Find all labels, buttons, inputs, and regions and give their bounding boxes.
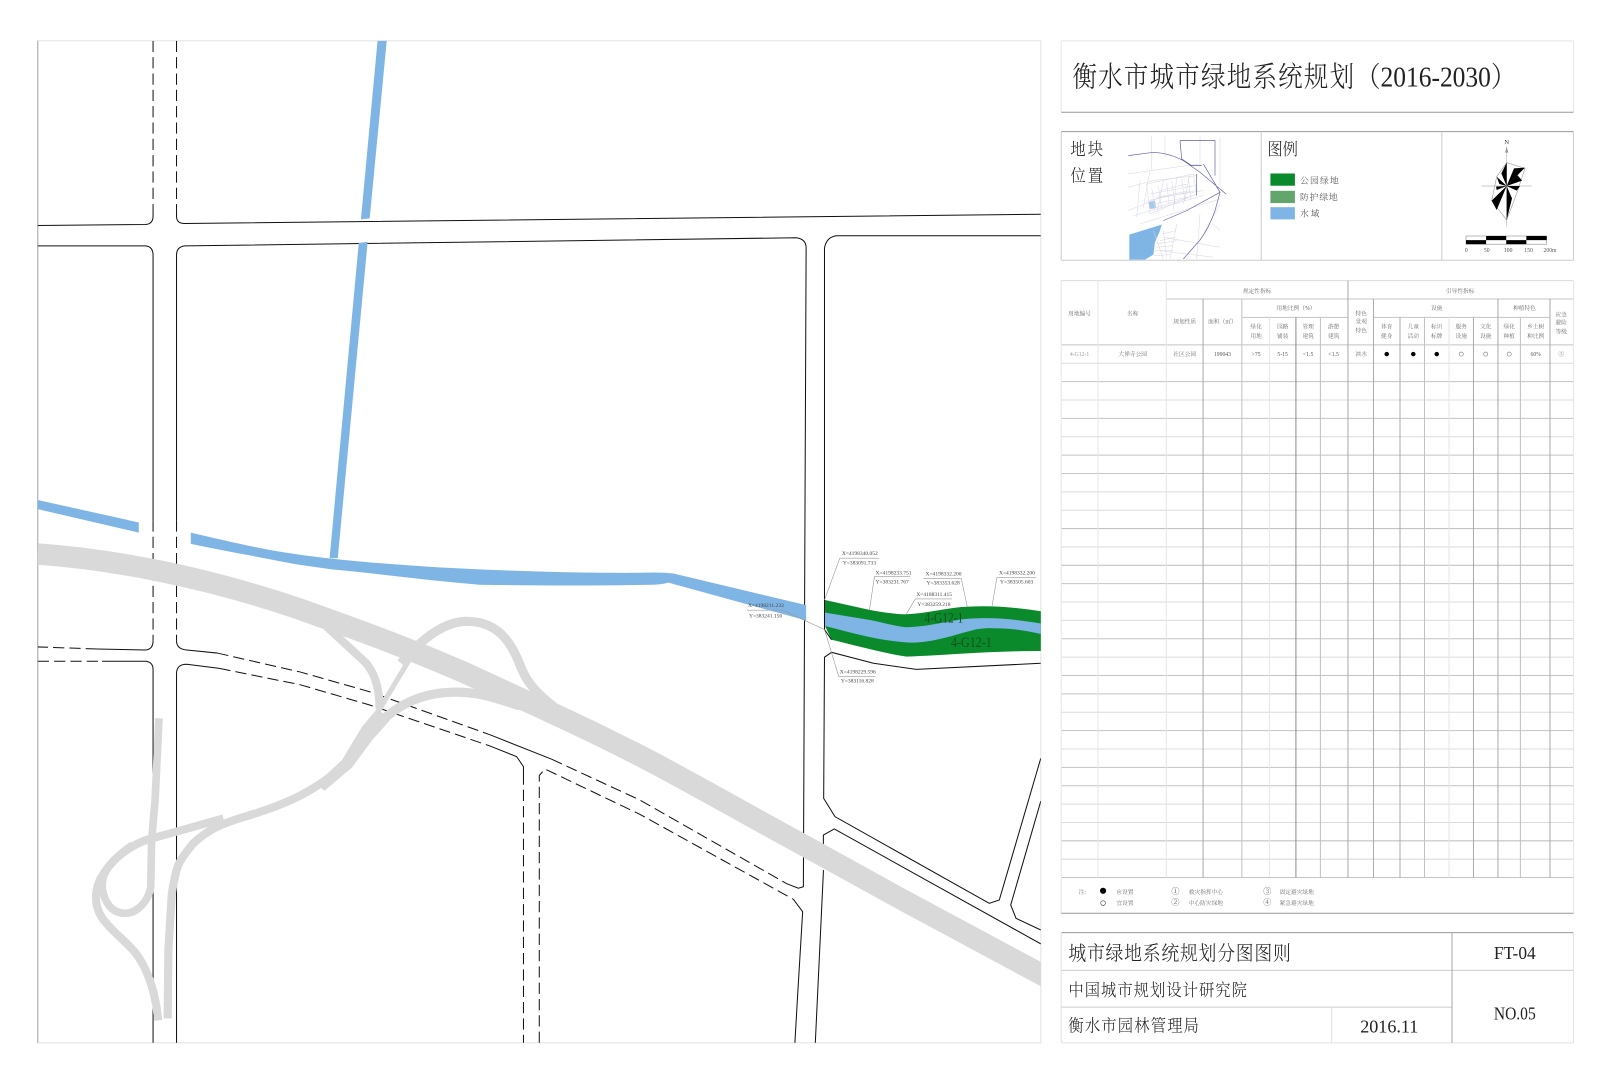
- heading: plan name: 衡水市城市绿地系统规划: [1072, 61, 1354, 93]
- coordinate texts: X=4188311.415: [916, 592, 952, 598]
- scale bar: 200m: [1543, 248, 1557, 254]
- table notes: ①: [1171, 887, 1180, 896]
- table header: 种植特色: [1513, 304, 1536, 312]
- table data row: 4-G12-1: [1070, 352, 1089, 358]
- table header: 管理: [1302, 323, 1314, 331]
- green park parcels: [825, 600, 1041, 657]
- panel: title: [1061, 41, 1573, 112]
- table header: 活动: [1408, 332, 1419, 340]
- heading: plan years: （2016-2030）: [1355, 61, 1516, 93]
- table header: 种植: [1503, 332, 1515, 340]
- table data row: 199043: [1214, 352, 1231, 358]
- table header: 应急: [1556, 310, 1567, 318]
- location label: [1070, 139, 1103, 186]
- location label: 位置: [1070, 167, 1103, 186]
- coordinate texts: X=4198332.200: [999, 570, 1035, 576]
- table header: 种比例: [1527, 332, 1545, 340]
- coordinate texts: X=4198233.751: [876, 570, 912, 576]
- coordinate texts: X=4198332.200: [926, 572, 962, 578]
- table notes: 注:: [1079, 888, 1086, 896]
- table header: 绿化: [1503, 323, 1515, 331]
- legend: buffer green: 防护绿地: [1300, 191, 1338, 202]
- table notes: 应设置: [1116, 888, 1134, 896]
- table header: 标识: [1431, 323, 1443, 331]
- scale bar: 100: [1504, 248, 1513, 254]
- scale bar: 50: [1484, 248, 1490, 254]
- table header: 特色: [1356, 327, 1367, 335]
- highway and interchange: [38, 554, 1051, 1020]
- table header: 标牌: [1431, 332, 1443, 340]
- table header: 引导性指标: [1446, 287, 1475, 295]
- table data row: [1070, 350, 1564, 358]
- table data row: 大禅寺公园: [1118, 350, 1147, 358]
- table header: 用地比例（%）: [1276, 304, 1315, 312]
- table header: 特色: [1356, 309, 1367, 317]
- table header: 建筑: [1302, 332, 1314, 340]
- table header: 游憩: [1328, 323, 1340, 331]
- parcel label lower: 4-G12-1: [951, 635, 992, 651]
- table notes: ④: [1263, 898, 1271, 907]
- date: 2016.11: [1360, 1017, 1418, 1037]
- legend: park green: [1270, 173, 1339, 186]
- table header: 规定性指标: [1243, 287, 1272, 295]
- table notes: ③: [1263, 887, 1271, 896]
- table data row: <1.5: [1328, 352, 1339, 358]
- table data row: 社区公园: [1173, 350, 1196, 358]
- table data row: <1.5: [1303, 352, 1313, 358]
- table header: 设施: [1456, 332, 1467, 340]
- table header: 园路: [1277, 323, 1289, 331]
- table data row: 60%: [1530, 352, 1541, 358]
- panel: title block: [1061, 933, 1573, 1043]
- table notes: 固定避灾绿地: [1280, 888, 1314, 896]
- table header: 服务: [1456, 323, 1467, 331]
- coordinate texts: Y=383259.218: [917, 602, 951, 608]
- drawing code: FT-04: [1494, 943, 1536, 963]
- coordinate texts: X=4198340.052: [842, 551, 878, 557]
- table header: 用地: [1250, 332, 1262, 340]
- coordinate texts: Y=383505.603: [1000, 580, 1033, 586]
- coordinate texts: Y=383353.628: [927, 581, 960, 587]
- legend: buffer green: [1270, 191, 1338, 203]
- scale bar: [1465, 236, 1557, 254]
- panel: control indicator table: [1061, 281, 1573, 913]
- legend: water: 水域: [1300, 207, 1320, 218]
- table header: 面积（㎡）: [1208, 317, 1237, 325]
- river and canal: [38, 41, 806, 620]
- table header: 健身: [1381, 332, 1393, 340]
- coordinate texts: Y=383241.156: [749, 613, 782, 619]
- table grid: [1061, 281, 1573, 913]
- table header: 名称: [1127, 309, 1139, 317]
- table header: 景观: [1356, 317, 1367, 325]
- table header: 文化: [1480, 323, 1492, 331]
- coordinate texts: X=4198229.596: [840, 669, 876, 675]
- coordinate texts: X=4198211.233: [748, 603, 784, 609]
- legend: water: [1270, 207, 1320, 219]
- table data row: ③: [1558, 350, 1564, 358]
- table notes: 救灾指挥中心: [1189, 888, 1223, 896]
- table header: 铺装: [1277, 332, 1289, 340]
- table header: 绿化: [1250, 323, 1262, 331]
- parcel label upper: 4-G12-1: [924, 610, 963, 626]
- table notes: 宜设置: [1116, 899, 1134, 907]
- table header: 建筑: [1328, 332, 1340, 340]
- design institute: 中国城市规划设计研究院: [1068, 981, 1247, 1000]
- survey coordinate callouts: [747, 551, 1036, 685]
- table header: [1068, 287, 1567, 340]
- table header: 设施: [1480, 332, 1492, 340]
- coordinate texts: Y=383091.733: [843, 560, 876, 566]
- client bureau: 衡水市园林管理局: [1068, 1017, 1199, 1036]
- icon: north arrow wind rose: [1482, 139, 1532, 227]
- table data row: 5-15: [1277, 352, 1288, 358]
- table notes: 紧急避灾绿地: [1280, 899, 1314, 907]
- table header: 规划性质: [1173, 317, 1196, 325]
- legend heading: 图例: [1267, 140, 1298, 159]
- table notes: 中心防灾绿地: [1189, 899, 1223, 907]
- table header: 设施: [1431, 304, 1443, 312]
- panel: site map: [38, 41, 1051, 1043]
- table header: 等级: [1556, 328, 1567, 336]
- table data row: >75: [1252, 352, 1261, 358]
- scale bar: 0: [1465, 248, 1468, 254]
- table header: 乡土树: [1527, 323, 1545, 331]
- table header: 用地编号: [1068, 309, 1091, 317]
- legend: park green: 公园绿地: [1300, 175, 1339, 186]
- coordinate texts: [748, 551, 1035, 685]
- drawing title: 城市绿地系统规划分图图则: [1068, 942, 1291, 965]
- icon: north arrow wind rose: N: [1504, 139, 1509, 146]
- table header: 体育: [1381, 323, 1393, 331]
- table header: 儿童: [1408, 323, 1419, 331]
- sheet number: NO.05: [1494, 1003, 1536, 1023]
- coordinate texts: Y=383116.828: [841, 679, 874, 685]
- table header: 避险: [1556, 318, 1567, 326]
- coordinate texts: Y=383231.767: [876, 580, 909, 586]
- table data row: 滨水: [1356, 350, 1367, 358]
- location key map: [1128, 136, 1226, 260]
- table notes: [1079, 887, 1314, 907]
- location label: 地块: [1070, 139, 1103, 159]
- panel: location legend compass: [1061, 132, 1573, 260]
- scale bar: 150: [1524, 248, 1533, 254]
- road network: [38, 41, 1041, 1043]
- table notes: ②: [1171, 898, 1180, 907]
